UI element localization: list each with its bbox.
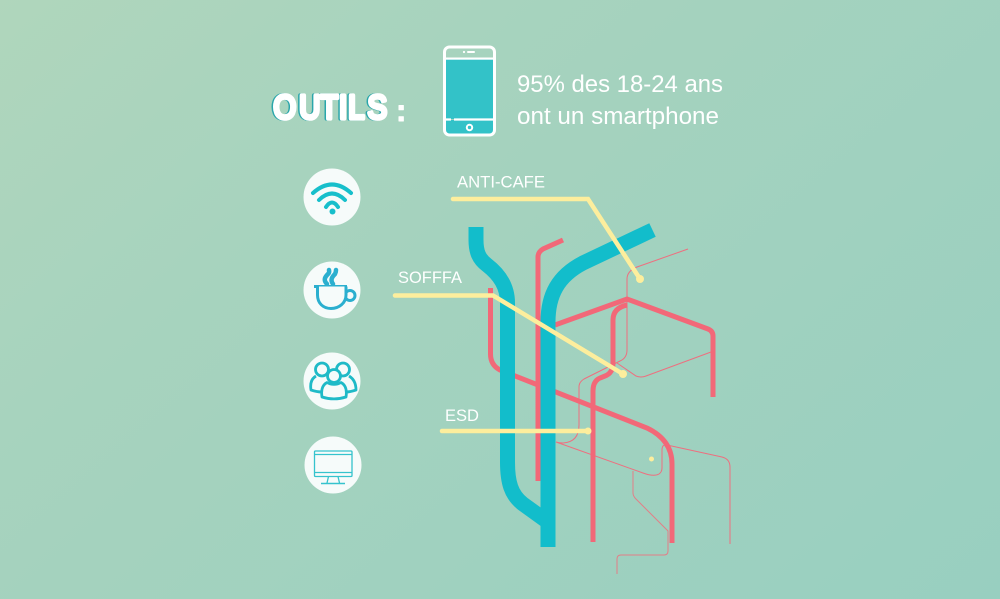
- icon: smartphone: [444, 47, 494, 135]
- metro map: [395, 199, 730, 574]
- icon: desktop monitor: [304, 436, 362, 494]
- statistic text: ont un smartphone: [517, 103, 719, 130]
- label: SOFFFA: SOFFFA: [398, 268, 463, 287]
- pink lines: [490, 240, 713, 543]
- thin network lines: [556, 249, 730, 574]
- label: ESD: ESD: [445, 406, 479, 425]
- icon: coffee cup: [304, 262, 360, 318]
- statistic text: [517, 71, 723, 130]
- yellow connectors: [395, 199, 640, 431]
- statistic text: 95% des 18-24 ans: [517, 71, 723, 98]
- title: :: [396, 93, 406, 128]
- title: OUTILS: [272, 89, 386, 126]
- icon: people: [304, 352, 360, 410]
- label: ANTI-CAFE: ANTI-CAFE: [457, 172, 545, 192]
- teal lines: [476, 227, 652, 547]
- title: OUTILS: [274, 89, 387, 126]
- icon: wifi: [304, 168, 360, 226]
